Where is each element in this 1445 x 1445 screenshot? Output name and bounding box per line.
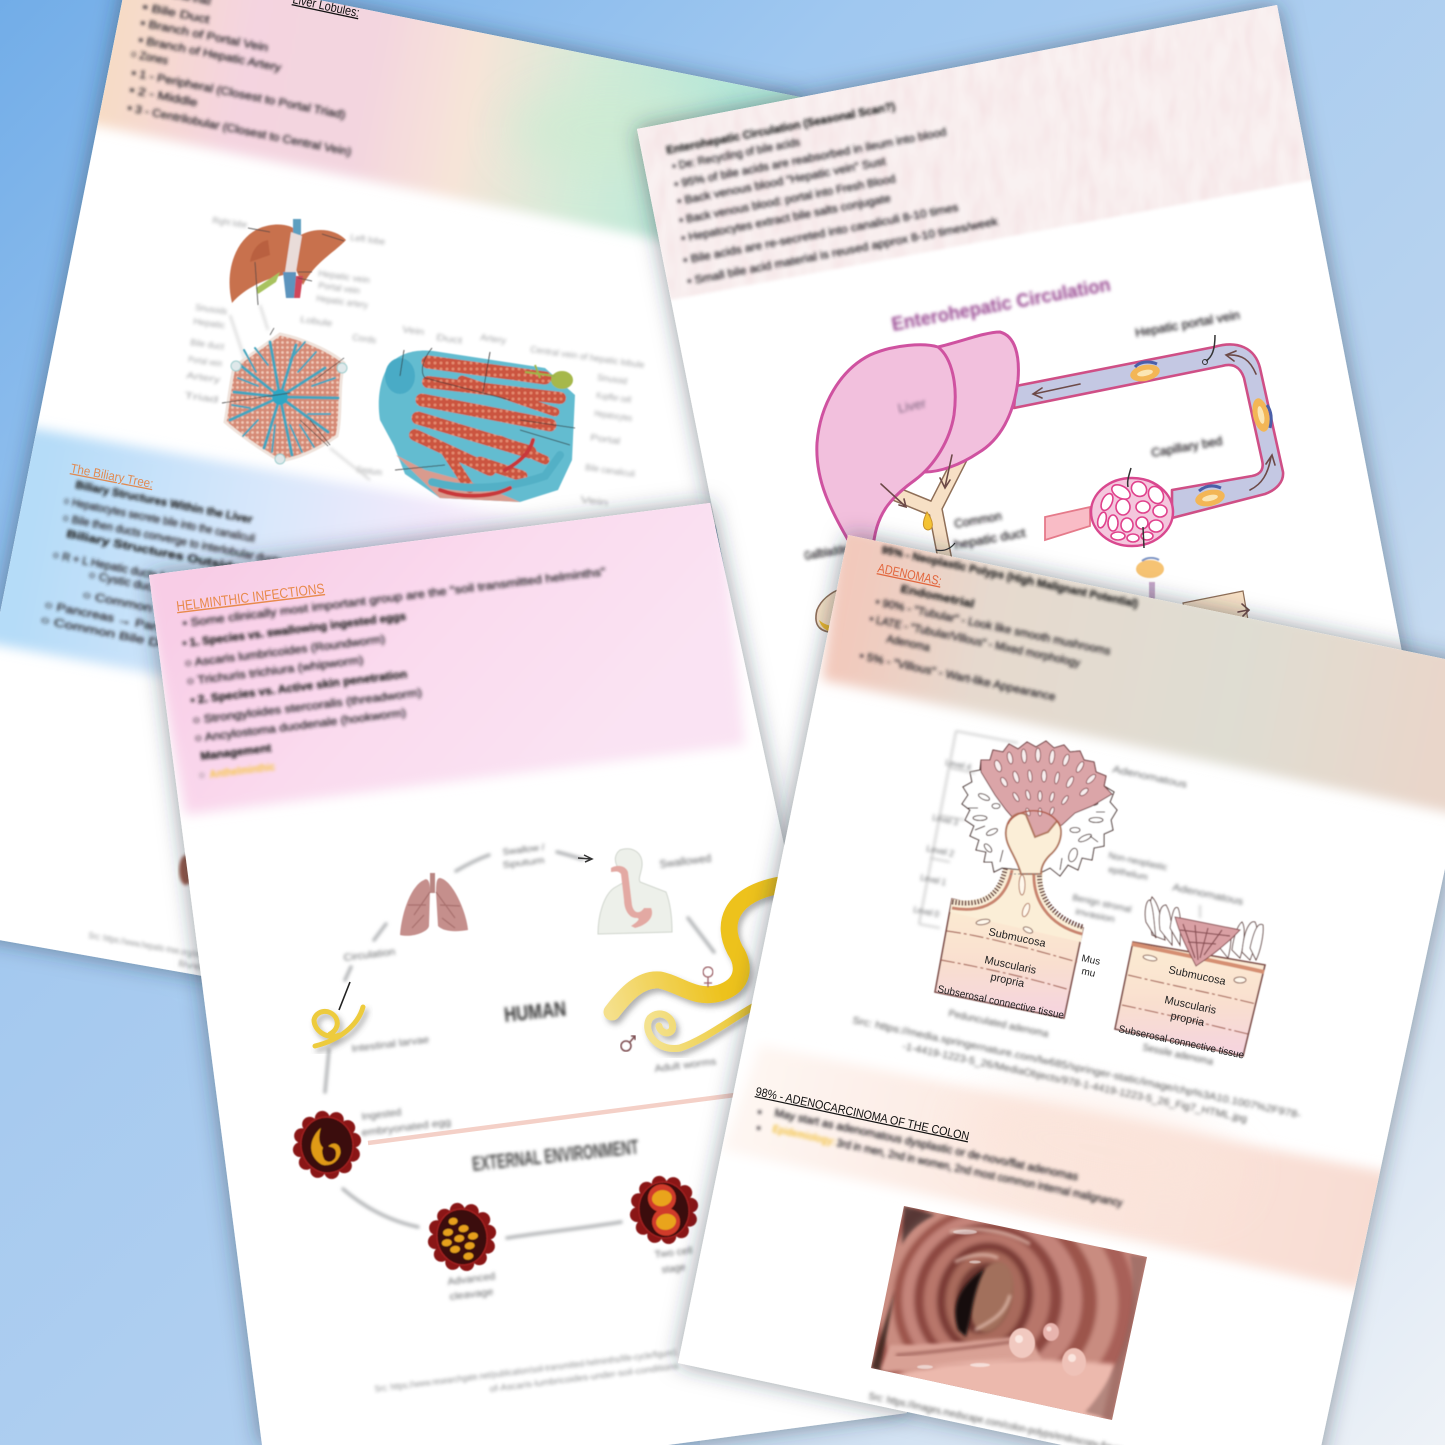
icon: female worm	[612, 885, 780, 1012]
bracket and blurred labels: Adenomatous	[1111, 764, 1188, 791]
text block: enterohepatic notes: Enterohepatic Circulation (Seasonal Scan?)	[665, 101, 897, 157]
icon: larva	[314, 1007, 363, 1046]
text block: enterohepatic notes	[665, 101, 999, 288]
diagram: liver	[230, 219, 346, 305]
red artery	[440, 440, 533, 496]
diagram: capillary bed inlet	[1045, 507, 1090, 540]
bracket and blurred labels: Level 0	[913, 904, 940, 919]
cleavage cells	[438, 1214, 482, 1264]
text block: biliary notes: ○ Common Bile Duct to duodenum	[81, 589, 299, 644]
text block: lobule notes	[126, 0, 352, 159]
icon: human torso	[598, 849, 672, 934]
text block: biliary notes: ○ R + L Hepatic ducts form Common Hepatic	[51, 549, 270, 604]
label: swallowed: cleavage	[449, 1287, 495, 1303]
diagram labels: liver: Artery	[186, 370, 221, 385]
diagram labels: liver: Portal vein	[188, 354, 223, 369]
label: swallowed: embryonated egg	[361, 1117, 452, 1139]
diagram labels: liver: Sinusoid	[597, 372, 628, 386]
diagram labels: liver: Portal vein	[318, 280, 361, 296]
polyp lace	[1180, 924, 1230, 960]
diagram labels: liver: Lobule	[300, 314, 333, 328]
label: swallowed: Adult worms	[654, 1057, 717, 1075]
bracket and blurred labels: Level 1	[920, 872, 947, 887]
diagram labels: liver	[184, 215, 645, 508]
text block: lobule notes: ▪ 2 - Middle	[128, 84, 198, 109]
text block: adenoma notes	[858, 583, 1112, 704]
labels: sessile tissue: Subserosal connective tissue	[1117, 1023, 1245, 1062]
diagram: liver tissue section	[379, 348, 575, 502]
text block: helminth notes: Anthelminthic	[209, 761, 276, 781]
diagram: liver lobes	[817, 332, 1018, 550]
white frond head	[962, 741, 1117, 876]
diagram labels: liver: Triad	[184, 390, 219, 405]
cells	[646, 1182, 678, 1214]
label: swallowed: stage	[661, 1262, 687, 1276]
panel: helminthic infections page	[140, 490, 780, 1394]
text block: adenoma notes: • LATE - "Tubular/Villous" - Mixed morphology	[868, 613, 1082, 670]
diagram: sessile adenoma	[1115, 897, 1265, 1056]
bracket and blurred labels: Sessile adenoma	[1141, 1042, 1214, 1068]
gallbladder	[816, 584, 880, 632]
arrow: duodenum	[1238, 604, 1249, 616]
label: swallowed: Swallow /	[502, 842, 545, 857]
diagram labels: liver: Septum	[356, 464, 383, 478]
peach wash	[954, 1077, 1246, 1223]
bile droplet	[923, 512, 932, 530]
text block: helminth notes: Management	[200, 742, 272, 763]
page shadow: enterohepatic page	[637, 5, 1420, 1200]
labels: pedunculated tissue: Submucosa	[987, 926, 1048, 950]
background lower left	[0, 900, 700, 1445]
page shadow: adenoma page	[678, 535, 1445, 1445]
diagram labels: liver: Bile canaliculi	[585, 462, 636, 479]
tissue layer lines	[1122, 975, 1256, 1034]
diagram labels: circulation: Gallbladder	[803, 541, 851, 563]
mucosa band	[1132, 944, 1264, 972]
white frond detail	[968, 792, 1105, 870]
textured pink band	[630, 0, 1322, 300]
text block: adenocarcinoma notes: May start as adenomatous dysplastic or de-novo/flat adenomas	[773, 1107, 1080, 1183]
text block: enterohepatic notes: • Back venous blood: portal into Fresh Blood	[678, 173, 897, 227]
blue band	[0, 422, 514, 680]
liver main lobe	[817, 345, 955, 550]
lobule body	[225, 334, 344, 461]
source text: adenoma figure: Src: https://media.springernature.com/lw685/springer-static/image/chp%3A10.1007%2F978-	[851, 1015, 1302, 1121]
label: swallowed: Circulation	[343, 947, 396, 964]
bracket and blurred labels	[913, 731, 1244, 1068]
diagram labels: circulation: Capillary bed	[1150, 434, 1223, 460]
pink adenoma crown	[981, 741, 1112, 838]
liver darker contour	[250, 240, 270, 262]
source text: adenoma figure: -1-4419-1223-5_26/MediaObjects/978-1-4419-1223-5_26_Fig7_HTML.jpg	[901, 1041, 1248, 1125]
text block: biliary notes: ○ Common Bile Duct → Ampulla	[39, 614, 259, 669]
leader lines	[1128, 335, 1215, 548]
diagram: capillary bed	[1091, 478, 1173, 546]
central vein	[385, 358, 415, 394]
label: swallowed: Intestinal larvae	[351, 1034, 430, 1055]
text block: enterohepatic notes: • Hepatocytes extract bile salts conjugate	[680, 193, 892, 245]
diagram labels: liver: Vein	[580, 494, 609, 508]
icon: two cell egg	[624, 1170, 704, 1250]
label: swallowed: Two cell	[654, 1245, 693, 1261]
icon: embryonated egg	[287, 1105, 367, 1185]
heading: biliary tree: The Biliary Tree:	[69, 461, 155, 491]
text block: enterohepatic notes: • Back venous blood "Hepatic vein" Sust	[676, 156, 887, 208]
tissue layer lines	[941, 931, 1077, 990]
labels: sessile tissue: Submucosa	[1167, 964, 1228, 988]
labels: sessile tissue: Muscularis	[1163, 994, 1218, 1017]
diagram: bile duct	[886, 455, 962, 575]
diagram labels: circulation: Hepatic portal vein	[1134, 308, 1241, 340]
egg shell	[287, 1105, 367, 1185]
vertical duct from micelle	[1149, 582, 1155, 604]
diagram labels: liver: Right lobe	[212, 215, 248, 230]
polyps	[1009, 1323, 1086, 1376]
lower folds	[880, 1335, 1042, 1372]
stalk head heart	[1006, 813, 1061, 874]
divider between human and environment	[368, 1095, 735, 1143]
diagram labels: liver: Sinusoids	[195, 302, 228, 316]
source text: Src: https://www.hepatic-tree.org/images	[88, 930, 218, 963]
lumen interior	[963, 1257, 1021, 1337]
text block: lobule notes: ▪ Branch of Hepatic Artery	[137, 34, 283, 74]
labels: sessile tissue: propria	[1169, 1010, 1206, 1029]
duodenum piece	[1183, 591, 1248, 632]
label: swallowed: Swallowed	[659, 853, 712, 871]
tissue blue background	[379, 350, 575, 502]
label: swallowed: Advanced	[447, 1271, 496, 1288]
pink polyp core	[1175, 917, 1240, 966]
text: carried-over heading: 95% - Neoplastic Polyps (High Malignant Potential)	[880, 544, 1139, 610]
fold highlights	[950, 1229, 1030, 1330]
text block: helminth notes: ○ Ancylostoma duodenale (hookworm)	[194, 707, 407, 745]
bracket and blurred labels: Non-neoplastic	[1108, 850, 1169, 873]
text block: adenocarcinoma notes: Epidemiology:	[771, 1123, 836, 1148]
diagram labels: liver: Central vein of hepatic lobule	[530, 344, 645, 370]
diagram labels: liver: Hepatic vein	[318, 268, 371, 285]
diagram: portal vein tube	[1014, 345, 1283, 518]
diagram labels: liver: Kupffer cell	[596, 390, 632, 405]
dark lumen	[955, 1268, 985, 1337]
swan larva	[308, 1125, 343, 1167]
top colour band	[96, 0, 800, 246]
text block: enterohepatic notes: • 95% of bile acids are reabsorbed in ileum into blood	[673, 126, 947, 191]
diagram labels: circulation	[803, 308, 1241, 563]
text block: adenoma notes: • 5% - "Villous" - Wart-like Appearance	[858, 650, 1057, 704]
panel: liver lobules page	[0, 0, 820, 973]
diagram labels: liver: Hepatic artery	[316, 293, 369, 310]
liver right lobe	[925, 332, 1018, 472]
text block: biliary notes: ○ Cystic duct joins the Common Hepatic	[87, 569, 296, 622]
labels: pedunculated tissue: propria	[989, 971, 1026, 990]
stalk mucosa comb	[952, 866, 1083, 927]
label: swallowed: Sputum	[502, 855, 545, 870]
green bile duct	[551, 371, 573, 389]
lobule radial sinusoids	[230, 342, 338, 455]
label: swallowed	[343, 842, 717, 1303]
source text: Src: https://www.researchgate.net/publication/soil-transmitted-helminths/life-cycle/figure1	[374, 1347, 678, 1394]
text block: biliary notes: Biliary Structures Within the Liver	[74, 479, 254, 526]
diagram: pedunculated adenoma	[935, 741, 1117, 1018]
sessile base	[1115, 942, 1265, 1056]
bracket and blurred labels: Adenomatous	[1171, 882, 1244, 908]
bracket and blurred labels: Benign stromal	[1072, 892, 1132, 914]
blue vessel	[432, 455, 560, 488]
text block: helminth notes: ○ Ascaris lumbricoides (Roundworm)	[184, 633, 386, 670]
icon: male symbol	[621, 1036, 635, 1051]
diagram: hepatic lobule	[222, 328, 347, 464]
label: swallowed: Ingested	[361, 1107, 402, 1123]
stalk	[950, 866, 1083, 942]
mucosal fold rings	[860, 1179, 1160, 1429]
label: human: HUMAN	[503, 998, 567, 1027]
panel: adenomas page	[722, 525, 1445, 1445]
icon: lungs	[400, 873, 468, 936]
pink band	[140, 490, 745, 815]
crown lace holes	[993, 748, 1097, 816]
bracket and blurred labels: Level 2	[926, 843, 955, 859]
stalk arc	[1008, 811, 1060, 826]
text block: helminth notes: • Some clinically most important group are the "soil transmitted helminths"	[182, 566, 606, 630]
diagram labels: liver: Duct	[436, 332, 464, 346]
central vein	[272, 389, 288, 405]
top band	[822, 525, 1445, 815]
text block: adenocarcinoma notes: 3rd in men, 2nd in women, 2nd most common internal malignancy	[835, 1137, 1124, 1210]
text block: adenoma notes: • 90% - "Tubular" - Look like smooth mushrooms	[874, 596, 1112, 658]
arrows: portal flow	[1033, 351, 1275, 490]
text block: helminth notes: ○	[198, 769, 206, 782]
heading: adenocarcinoma: 98% - ADENOCARCINOMA OF THE COLON	[754, 1084, 971, 1143]
labels: pedunculated tissue: mu	[1080, 966, 1096, 980]
label: external environment: EXTERNAL ENVIRONMENT	[471, 1137, 640, 1176]
chart title: enterohepatic circulation: Enterohepatic Circulation	[890, 275, 1112, 336]
label: liver: Liver	[897, 395, 928, 416]
text block: lobule notes: ▪ 3 - Centrilobular (Closest to Central Vein)	[126, 102, 352, 159]
heading: helminthic infections: HELMINTHIC INFECTIONS	[175, 580, 325, 614]
labels: sessile tissue	[1117, 964, 1245, 1062]
leader lines	[395, 348, 575, 470]
bracket and blurred labels: Level 3	[932, 812, 959, 827]
bracket and blurred labels: invasion	[1075, 906, 1116, 924]
egg shell	[624, 1170, 704, 1250]
diagram labels: liver: Bile duct	[190, 337, 225, 352]
text block: lobule notes: ▪ Branch of Portal Vein	[139, 17, 269, 54]
labels: pedunculated tissue: Subserosal connective tissue	[936, 983, 1065, 1022]
micelle lower	[1194, 486, 1226, 509]
vignette	[871, 1290, 915, 1385]
icon: female symbol	[703, 967, 713, 987]
icon: male worm	[648, 1003, 760, 1048]
panel: enterohepatic circulation page	[630, 0, 1322, 632]
labels: pedunculated tissue: Muscularis	[983, 954, 1038, 977]
text block: helminth notes: • 2. Species vs. Active skin penetration	[190, 668, 408, 707]
text block: adenocarcinoma notes	[755, 1106, 1124, 1210]
egg shell	[422, 1197, 502, 1277]
diagram labels: circulation: hepatic duct	[953, 526, 1027, 552]
text block: lobule notes: ○ Zones	[129, 48, 169, 67]
text block: enterohepatic notes: • Small bile acid material is reused approx 8-10 times/week	[686, 216, 999, 288]
cycle arrows	[325, 852, 714, 1238]
text block: biliary notes: ○ Pancreas → Pancreatic duct joins	[43, 599, 262, 654]
text block: biliary notes	[39, 479, 339, 669]
diagram labels: liver: Left lobe	[350, 232, 386, 247]
leader lines	[222, 328, 344, 446]
text block: biliary notes: ○ Hepatocytes secrete bile into the canaliculi	[62, 495, 256, 545]
diagram labels: liver: Hepatic	[193, 316, 226, 331]
diagram labels: circulation: Common	[953, 509, 1003, 531]
text block: enterohepatic notes: • De: Recycling of bile acids	[671, 136, 802, 173]
text block: adenoma notes: Adenoma	[885, 633, 932, 654]
micelle on tube	[1129, 362, 1161, 384]
text block: helminth notes	[182, 566, 606, 782]
bracket and blurred labels: Level 4	[945, 757, 972, 772]
tissue lower pink	[396, 455, 520, 502]
pale lower fold	[895, 1359, 1115, 1428]
micelle vertical	[1250, 397, 1272, 433]
source text: liver	[178, 958, 209, 973]
page shadow: helminthic page	[149, 503, 907, 1445]
diagram labels: liver: Cords	[352, 332, 377, 345]
diagram labels: liver: Hepatocytes	[594, 408, 633, 423]
glints	[917, 1230, 990, 1369]
text block: helminth notes: ○ Trichuris trichiura (whipworm)	[186, 654, 364, 688]
heading: adenomas: ADENOMAS:	[876, 560, 943, 588]
source text: of-Ascaris-lumbricoides-under-soil-conditions	[489, 1361, 679, 1394]
capillary openings	[1096, 478, 1167, 542]
arrow head: into person	[578, 855, 592, 862]
text block: helminth notes: • 1. Species vs. swallowing ingested eggs	[182, 611, 407, 650]
diagram labels: liver: Vein	[402, 324, 425, 337]
hepatocyte plates	[415, 362, 560, 488]
text block: adenoma notes: Endometrial	[899, 583, 975, 611]
page shadow: liver page	[0, 0, 800, 1060]
bracket and blurred labels: Pedunculated adenoma	[947, 1008, 1050, 1040]
micelle isolated	[1136, 558, 1164, 578]
text block: biliary notes: ○ Bile then ducts converge to interlobular ducts → ductules	[61, 512, 339, 579]
text block: adenocarcinoma notes: ▪	[756, 1106, 763, 1119]
stalk inner layer	[952, 870, 1082, 934]
text block: biliary notes: Biliary Structures Outside the Liver	[65, 528, 304, 587]
lower band	[722, 1045, 1400, 1290]
left liver lobe	[296, 230, 346, 285]
text block: enterohepatic notes: • Bile acids are re-secreted into canaliculi 8-10 times	[682, 202, 960, 267]
diagram labels: liver: Artery	[480, 332, 507, 346]
base tissue block	[935, 899, 1083, 1018]
labels: pedunculated tissue	[936, 926, 1101, 1022]
vena cava	[293, 219, 301, 235]
leader: common duct	[936, 543, 955, 551]
text block: adenocarcinoma notes: ▪	[755, 1122, 762, 1135]
diagram labels: liver: Portal	[590, 432, 621, 446]
arrows: duct	[881, 455, 952, 507]
fronds	[1145, 897, 1263, 960]
bile in gallbladder	[819, 620, 850, 632]
gallbladder	[256, 272, 280, 294]
text block: lobule notes: ▪ Bile Duct	[141, 1, 210, 26]
icon: advanced cleavage egg	[422, 1197, 502, 1277]
photo: colonoscopy with polyps	[860, 1179, 1160, 1429]
labels: pedunculated tissue: Mus	[1080, 953, 1101, 968]
icon: cut off organ	[179, 855, 193, 885]
text block: lobule notes: ▪ 1 - Peripheral (Closest to Portal Triad)	[130, 67, 347, 122]
leader line: larva	[339, 982, 350, 1010]
green wash	[516, 104, 563, 147]
text block: helminth notes: ○ Strongyloides stercoralis (threadworm)	[192, 687, 423, 727]
right liver lobe	[230, 225, 298, 303]
bracket and blurred labels: epithelium	[1108, 864, 1149, 882]
